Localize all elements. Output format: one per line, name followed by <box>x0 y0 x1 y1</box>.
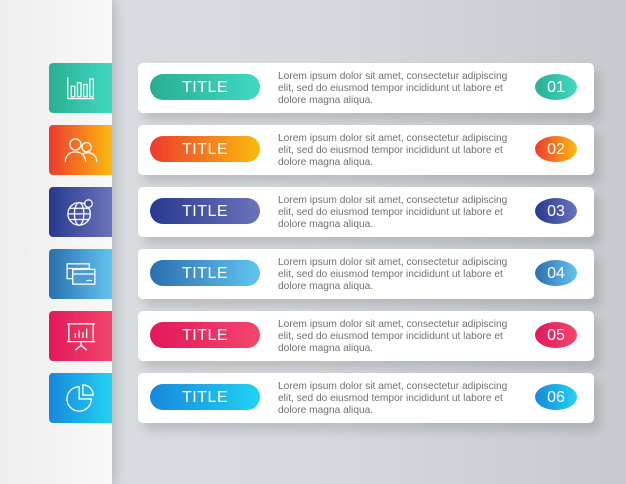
text 02: elit, sed do eiusmod tempor incididunt ut labore et <box>278 145 503 156</box>
text 04 <box>278 257 507 292</box>
text 06: Lorem ipsum dolor sit amet, consectetur adipiscing <box>278 381 507 392</box>
text 05 <box>278 319 507 354</box>
card 01 <box>138 63 594 113</box>
number 05 <box>535 322 577 348</box>
number 03: 03 <box>547 203 565 220</box>
icon tile 6: pie chart <box>49 373 112 423</box>
title pill 03 <box>150 198 260 224</box>
text 02 <box>278 133 507 168</box>
text 03: elit, sed do eiusmod tempor incididunt ut labore et <box>278 207 503 218</box>
card 06 <box>138 373 594 423</box>
number 01 <box>535 74 577 100</box>
text 03 <box>278 195 507 230</box>
text 05: elit, sed do eiusmod tempor incididunt ut labore et <box>278 331 503 342</box>
card 02 <box>138 125 594 175</box>
number 02: 02 <box>547 141 565 158</box>
card 04 <box>138 249 594 299</box>
text 06: dolore magna aliqua. <box>278 405 373 416</box>
text 01: Lorem ipsum dolor sit amet, consectetur adipiscing <box>278 71 507 82</box>
text 02: Lorem ipsum dolor sit amet, consectetur adipiscing <box>278 133 507 144</box>
text 05: Lorem ipsum dolor sit amet, consectetur adipiscing <box>278 319 507 330</box>
number 04 <box>535 260 577 286</box>
title pill 06 <box>150 384 260 410</box>
text 03: dolore magna aliqua. <box>278 219 373 230</box>
text 05: dolore magna aliqua. <box>278 343 373 354</box>
title pill 01: TITLE <box>182 79 228 96</box>
number 06 <box>535 384 577 410</box>
icon tile 4: cards <box>49 249 112 299</box>
number 06: 06 <box>547 389 565 406</box>
title pill 05: TITLE <box>182 327 228 344</box>
number 01: 01 <box>547 79 565 96</box>
number 03 <box>535 198 577 224</box>
text 02: dolore magna aliqua. <box>278 157 373 168</box>
title pill 04: TITLE <box>182 265 228 282</box>
left panel <box>0 0 112 484</box>
icon tile 1: bar chart <box>49 63 112 113</box>
icon tile 3: globe pin <box>49 187 112 237</box>
text 01: dolore magna aliqua. <box>278 95 373 106</box>
text 01 <box>278 71 507 106</box>
text 03: Lorem ipsum dolor sit amet, consectetur adipiscing <box>278 195 507 206</box>
title pill 03: TITLE <box>182 203 228 220</box>
title pill 01 <box>150 74 260 100</box>
title pill 05 <box>150 322 260 348</box>
text 04: Lorem ipsum dolor sit amet, consectetur adipiscing <box>278 257 507 268</box>
icon tile 5: presentation <box>49 311 112 361</box>
card 05 <box>138 311 594 361</box>
text 04: dolore magna aliqua. <box>278 281 373 292</box>
text 06: elit, sed do eiusmod tempor incididunt ut labore et <box>278 393 503 404</box>
title pill 02 <box>150 136 260 162</box>
icon tile 2: users <box>49 125 112 175</box>
number 04: 04 <box>547 265 565 282</box>
title pill 06: TITLE <box>182 389 228 406</box>
title pill 02: TITLE <box>182 141 228 158</box>
title pill 04 <box>150 260 260 286</box>
text 01: elit, sed do eiusmod tempor incididunt ut labore et <box>278 83 503 94</box>
text 06 <box>278 381 507 416</box>
text 04: elit, sed do eiusmod tempor incididunt ut labore et <box>278 269 503 280</box>
number 05: 05 <box>547 327 565 344</box>
card 03 <box>138 187 594 237</box>
number 02 <box>535 136 577 162</box>
